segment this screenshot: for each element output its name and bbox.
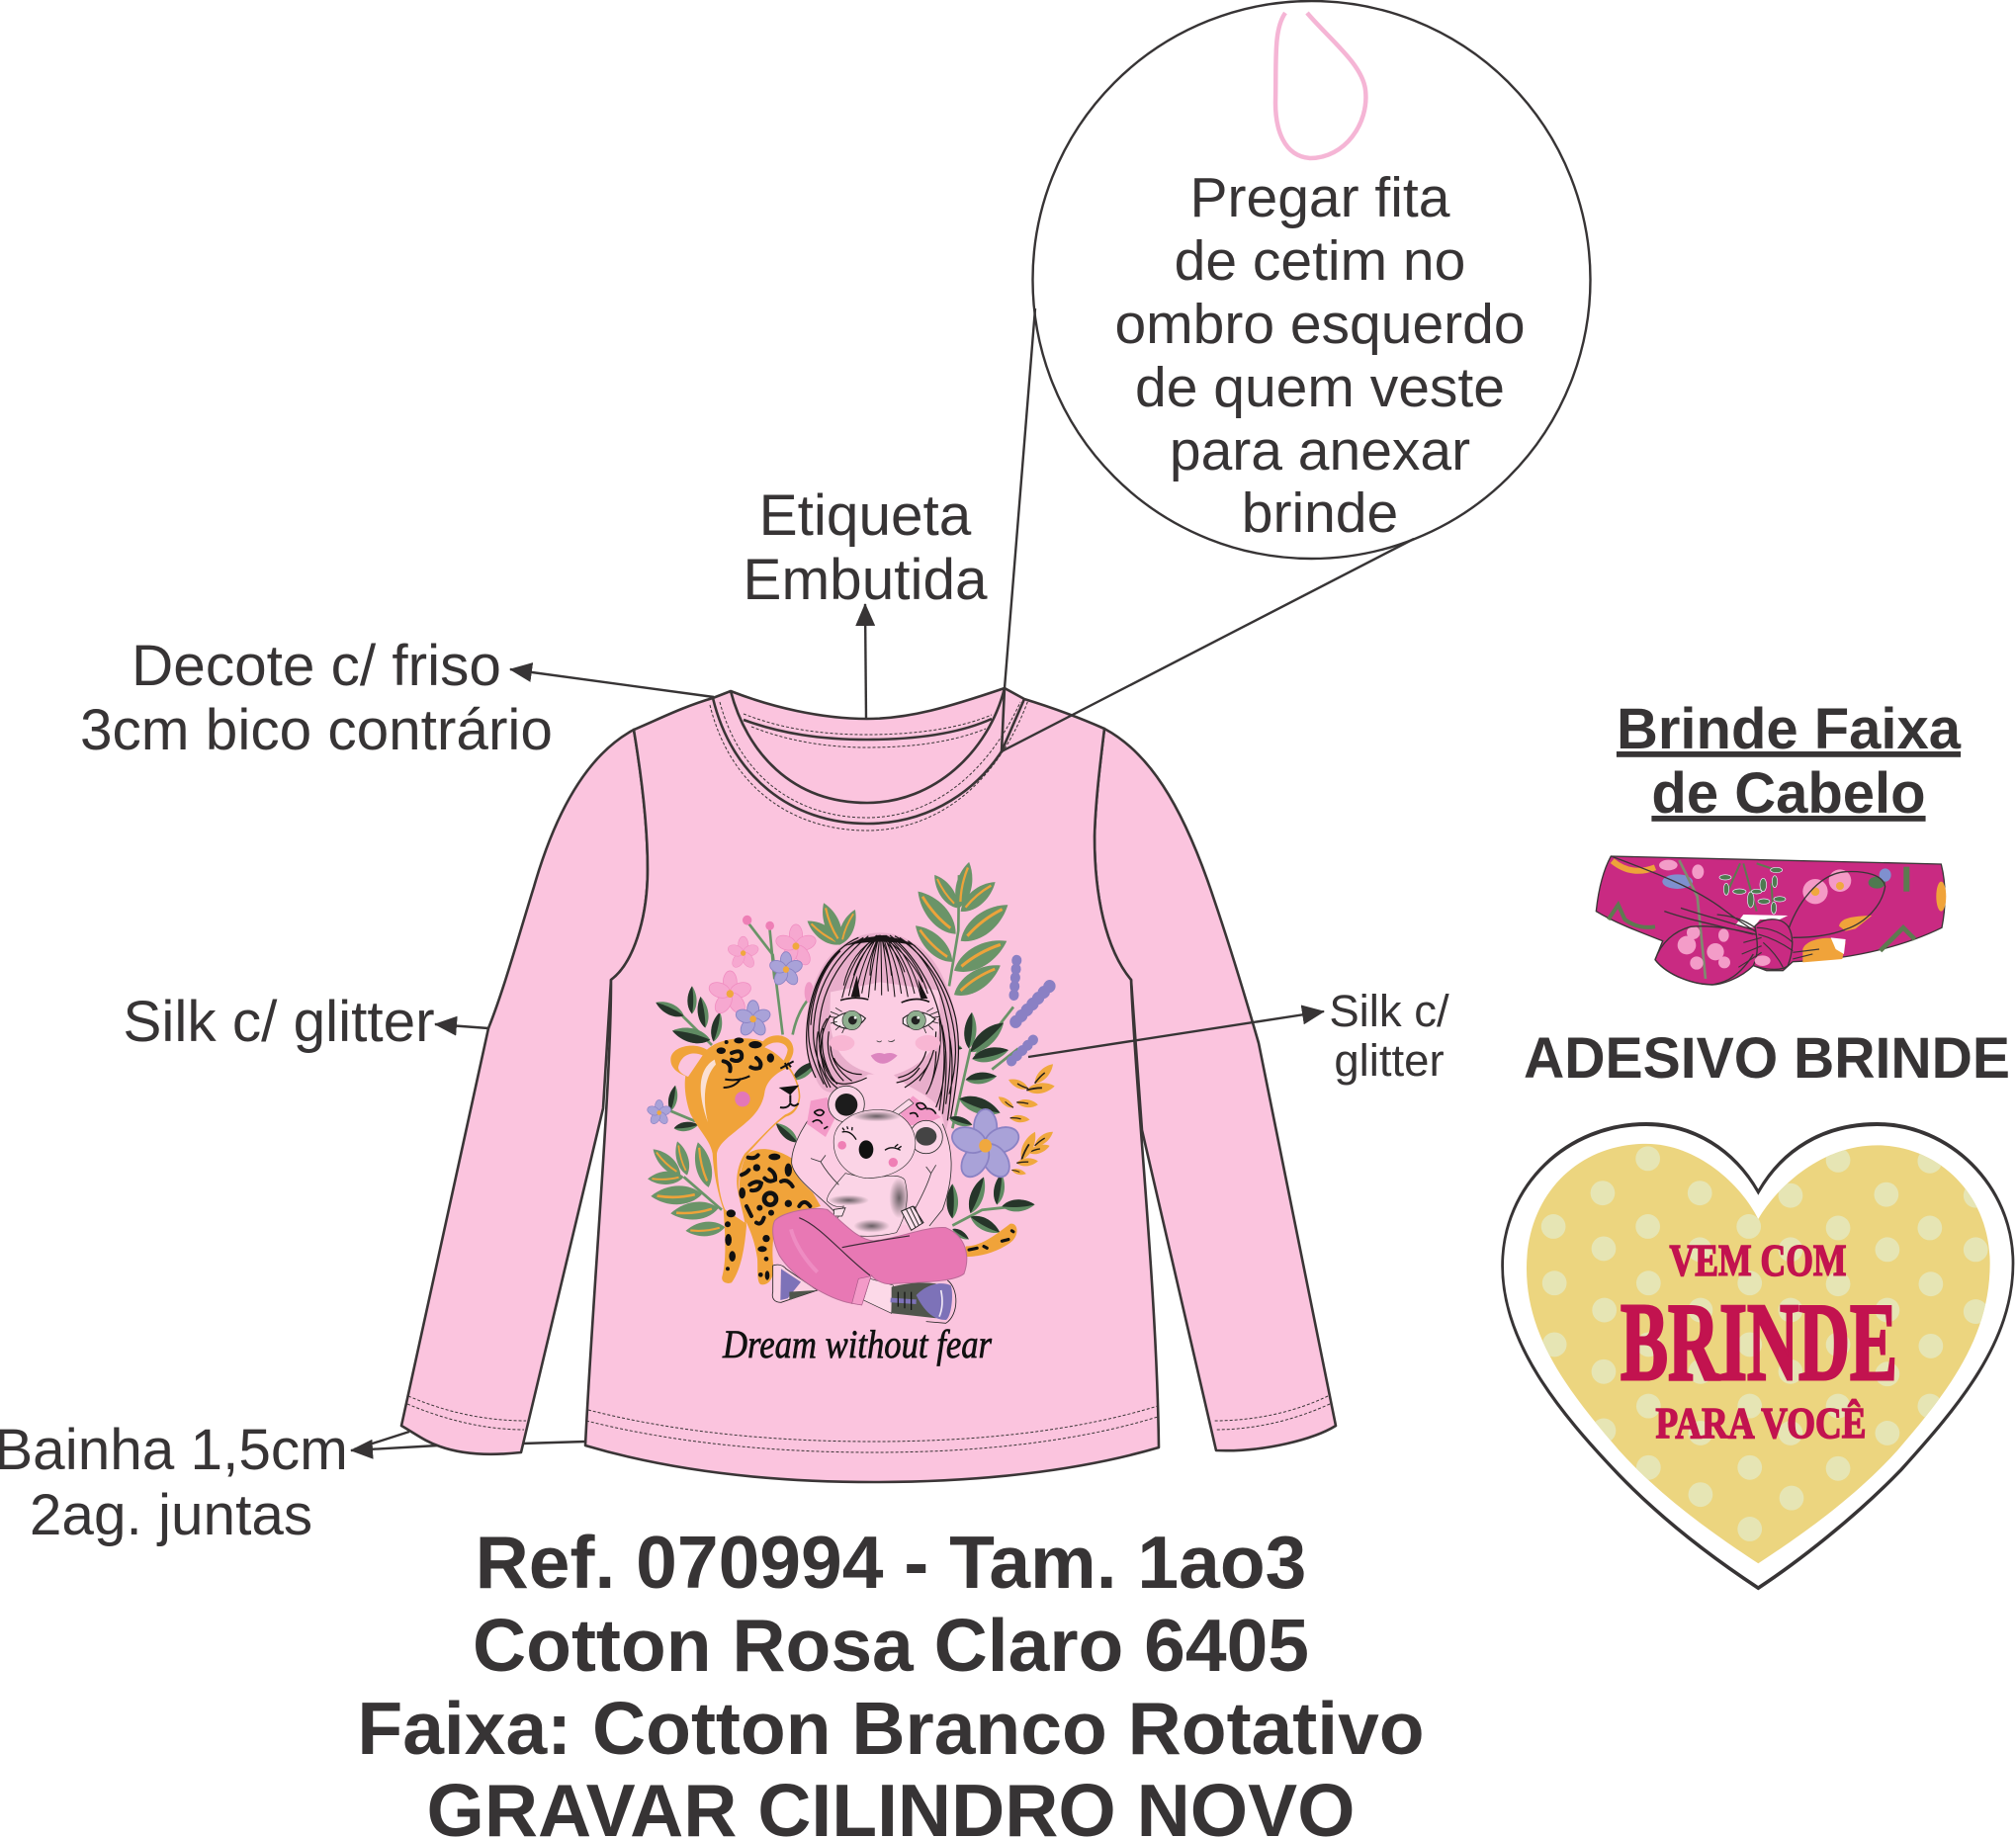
headband illustration [1596, 856, 1946, 985]
girl's lap with koala [772, 1086, 967, 1323]
arm details and cuffs [811, 1155, 936, 1230]
leopard spots [717, 1037, 810, 1280]
green fern leaves [648, 860, 1013, 1238]
leopard-print sleeves [807, 1095, 941, 1137]
socks [863, 1278, 893, 1313]
pants details [791, 1218, 910, 1305]
gap under the band [1735, 915, 1788, 927]
girl's head [806, 932, 958, 1130]
print artwork: girl, leopard and koala [647, 860, 1056, 1323]
girl's torso and arms [792, 1055, 951, 1229]
band fabric [1596, 856, 1945, 985]
koala head [833, 1110, 916, 1179]
shirt body [585, 688, 1159, 1482]
lavender sprigs [1010, 960, 1050, 1063]
left sneaker [772, 1265, 818, 1302]
koala head shading [852, 1111, 902, 1121]
icon: satin ribbon loop [1275, 13, 1365, 158]
arrow: Silk right [1028, 1011, 1324, 1057]
hair silhouette [806, 932, 958, 1130]
label: Decote: Decote c/ friso [131, 634, 501, 698]
leopard highlight and cheek [701, 1060, 750, 1122]
product reference text block: Faixa: Cotton Branco Rotativo [357, 1687, 1425, 1770]
text: ribbon instruction: de cetim no [1175, 229, 1465, 293]
flowers [647, 916, 1022, 1182]
botanical background [647, 860, 1056, 1257]
label: Bainha: Bainha 1,5cm [0, 1418, 348, 1482]
plant stems [670, 875, 1031, 1225]
pants [773, 1208, 967, 1303]
koala body [828, 1174, 907, 1236]
leopard snout and chest [717, 1068, 799, 1223]
label: Etiqueta Embutida: Etiqueta [759, 483, 972, 548]
heading: Brinde Faixa de Cabelo: de Cabelo [1651, 761, 1926, 826]
fringe strands [842, 935, 927, 998]
leopard tail [966, 1224, 1017, 1257]
knot [1753, 920, 1793, 969]
collar rib [713, 698, 1024, 824]
product reference text block: Ref. 070994 - Tam. 1ao3 [476, 1521, 1306, 1604]
brows [840, 998, 929, 1003]
leopard body and hind leg [740, 1149, 821, 1284]
knot details [1738, 927, 1819, 967]
label: Silk left: Silk c/ glitter [123, 990, 435, 1054]
face [830, 982, 940, 1078]
heart outline and fill [1503, 1124, 2013, 1588]
right eye [903, 1007, 939, 1033]
left sleeve [401, 730, 648, 1454]
label: Silk right: Silk c/ [1329, 986, 1449, 1036]
text: ribbon instruction: Pregar fita [1190, 166, 1450, 229]
print slogan: Dream without fear [722, 1322, 992, 1366]
heading: Brinde Faixa de Cabelo: Brinde Faixa [1617, 697, 1962, 761]
band print motifs [1609, 860, 1946, 979]
circle outline [1032, 1, 1590, 559]
hem and cuff stitching [588, 1406, 1158, 1442]
text: ribbon instruction: brinde [1242, 482, 1398, 545]
arrow: Bainha [351, 1432, 585, 1450]
arrow: Etiqueta [865, 604, 866, 719]
callout pointer lines to the shoulder [1002, 308, 1414, 751]
orange branches [997, 1061, 1056, 1177]
arrow: Silk left [435, 1024, 488, 1028]
bow loops and tie lines [1611, 856, 1885, 985]
polka dots [1541, 1146, 1988, 1541]
nose and lips [871, 1040, 898, 1064]
sticker text: VEM COM: VEM COM [1669, 1236, 1847, 1285]
right sneaker [891, 1280, 956, 1323]
heading: ADESIVO BRINDE: ADESIVO BRINDE [1524, 1026, 2010, 1091]
koala shading [829, 1178, 909, 1233]
right sleeve [1095, 729, 1336, 1450]
label: Decote: 3cm bico contrário [80, 698, 553, 762]
text: ribbon instruction: ombro esquerdo [1114, 293, 1526, 356]
arrow: Decote [510, 669, 714, 697]
leopard face marks [724, 1061, 799, 1107]
hair strands [807, 935, 958, 1120]
koala ears [829, 1086, 942, 1154]
koala face [837, 1126, 902, 1167]
heart sticker [1503, 1124, 2013, 1588]
t-shirt technical drawing [401, 688, 1336, 1482]
hair crown [845, 936, 927, 999]
label: Etiqueta Embutida: Embutida [743, 548, 988, 612]
leopard head, neck and foreleg [670, 1035, 800, 1283]
leopard ear inner [678, 1042, 788, 1077]
left eye [829, 1007, 865, 1033]
label: Silk right: glitter [1334, 1035, 1445, 1086]
text: ribbon instruction: para anexar [1170, 419, 1470, 482]
label: Bainha: 2ag. juntas [30, 1483, 312, 1547]
dark leaves [654, 986, 1035, 1243]
callout circle: ribbon instruction [1032, 1, 1590, 559]
text: ribbon instruction: de quem veste [1135, 356, 1505, 419]
sticker text: PARA VOCÊ: PARA VOCÊ [1655, 1399, 1867, 1447]
leopard [670, 1035, 821, 1284]
product reference text block: Cotton Rosa Claro 6405 [473, 1604, 1309, 1687]
blush [830, 1035, 940, 1051]
